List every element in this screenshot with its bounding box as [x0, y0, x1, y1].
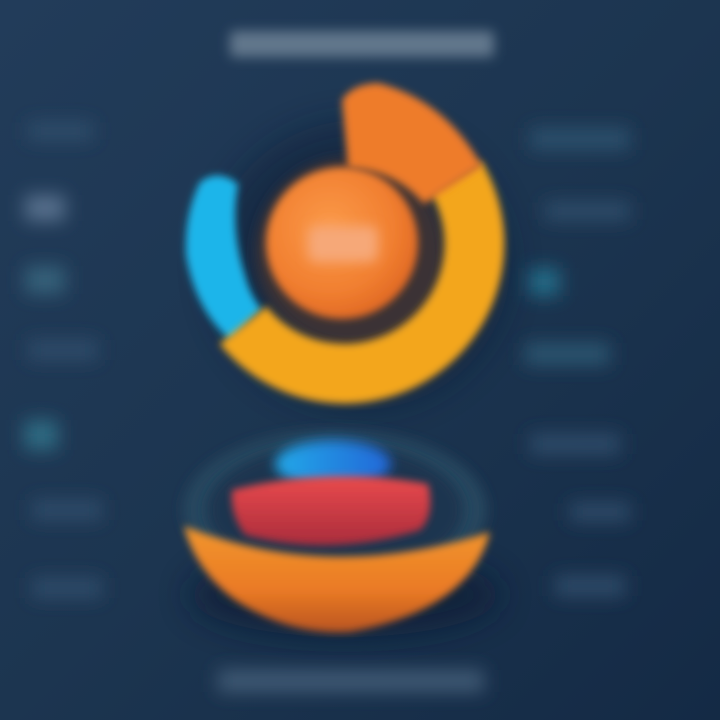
bowl chart [183, 430, 500, 637]
center orange circle [266, 167, 418, 319]
label 2 [545, 202, 630, 220]
red middle layer [232, 476, 430, 545]
donut chart [186, 83, 510, 410]
left column labels [24, 122, 102, 598]
label 4 [28, 340, 98, 360]
center label [308, 226, 378, 262]
bowl backdrop [183, 430, 487, 590]
bowl shadow [190, 553, 500, 637]
footer [218, 670, 484, 692]
title [230, 31, 494, 57]
label 5 [530, 434, 620, 454]
label 2 [25, 195, 65, 221]
label 3 [528, 268, 560, 296]
label 1 [28, 122, 93, 140]
label 7 [32, 578, 102, 598]
label 6 [570, 503, 630, 521]
blue top layer [275, 440, 391, 488]
donut shadow [210, 120, 510, 410]
dark inner ring [256, 158, 444, 346]
label 5 [24, 420, 58, 450]
label 7 [555, 576, 625, 596]
label 3 [25, 266, 65, 294]
right column labels [525, 128, 630, 596]
label 6 [32, 500, 102, 520]
orange bottom layer [184, 526, 490, 632]
orange segment [342, 83, 482, 204]
label 4 [525, 343, 610, 365]
label 1 [530, 128, 630, 150]
blue segment [186, 175, 262, 342]
yellow segment [243, 177, 474, 374]
